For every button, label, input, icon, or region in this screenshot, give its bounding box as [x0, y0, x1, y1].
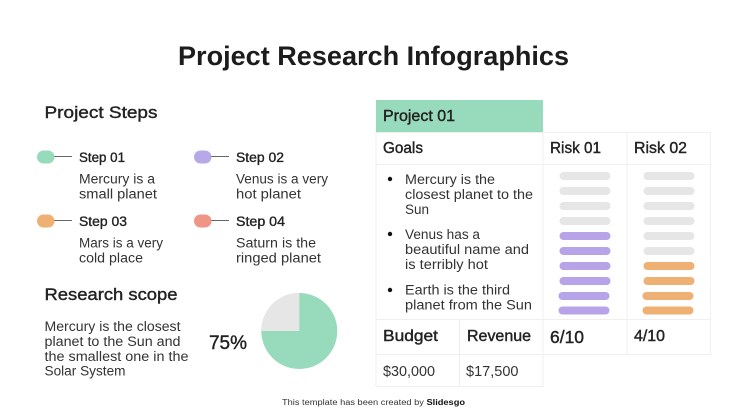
step 02: hot planet: [236, 186, 301, 202]
budget label: Budget: [383, 328, 439, 345]
step 01: small planet: [79, 186, 157, 202]
panel: project steps: [37, 103, 328, 266]
column heading: goals: Goals: [383, 140, 423, 157]
goals list: planet from the Sun: [405, 298, 532, 312]
text block: research description: Mercury is the closest: [44, 319, 181, 334]
step 04: Saturn is the: [236, 236, 316, 250]
revenue label: Revenue: [467, 328, 531, 345]
goals list: is terribly hot: [405, 257, 488, 272]
footer credit: This template has been created by Slidesgo: [282, 398, 465, 407]
text block: research description: [44, 319, 188, 378]
step 03: Mars is a very: [79, 236, 163, 250]
table header: project 01: Project 01: [383, 108, 455, 125]
revenue value: $17,500: [466, 364, 518, 380]
percentage label: 75%: [209, 333, 247, 354]
budget value: $30,000: [383, 364, 435, 380]
step 01: [37, 150, 157, 202]
risk 01 score: 6/10: [550, 327, 584, 347]
goals list: Mercury is the: [405, 172, 495, 187]
step 03: Step 03: [79, 214, 127, 229]
step 02: Venus is a very: [236, 172, 328, 186]
column heading: risk 02: Risk 02: [634, 140, 687, 157]
step 01: Step 01: [79, 150, 125, 165]
goals list: Earth is the third: [405, 282, 510, 298]
risk 02 score: 4/10: [634, 328, 665, 345]
panel: project table: [376, 100, 710, 386]
goals list: [388, 172, 533, 312]
step 03: [37, 214, 163, 266]
table header: project 01: [376, 100, 543, 132]
risk 02 bars: [642, 172, 694, 314]
step 04: ringed planet: [236, 250, 321, 266]
goals list: Venus has a: [405, 227, 480, 242]
step 01: Mercury is a: [79, 172, 156, 186]
step 04: Step 04: [236, 214, 286, 229]
panel: research scope: [44, 285, 337, 378]
heading: research scope: Research scope: [44, 285, 178, 304]
step 02: [194, 150, 328, 202]
goals list: Sun: [405, 202, 429, 217]
text block: research description: Solar System: [44, 364, 126, 378]
text block: research description: the smallest one in the: [44, 349, 188, 364]
text block: research description: planet to the Sun and: [44, 334, 180, 349]
step 02: Step 02: [236, 150, 284, 165]
goals list: beautiful name and: [405, 242, 529, 257]
step 03: cold place: [79, 250, 143, 266]
risk 01 bars: [558, 172, 610, 314]
goals list: closest planet to the: [405, 187, 533, 202]
step 04: [194, 214, 321, 266]
pie chart: [261, 293, 337, 369]
title: Project Research Infographics: [178, 41, 569, 71]
heading: project steps: Project Steps: [44, 103, 158, 122]
column heading: risk 01: Risk 01: [550, 140, 601, 157]
